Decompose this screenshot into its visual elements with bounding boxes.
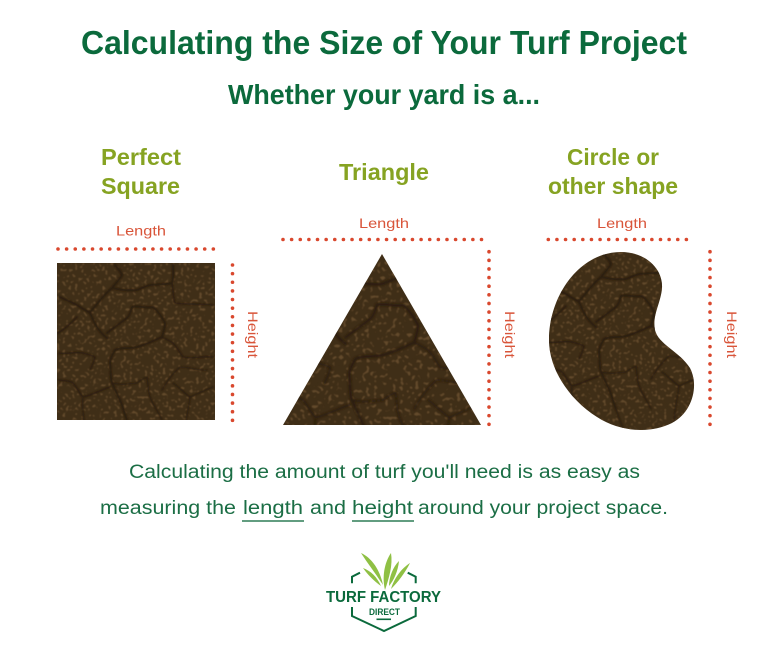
- height label: Height: [724, 311, 740, 358]
- length label: Length: [597, 215, 647, 231]
- icon: grass blades: [361, 553, 410, 590]
- logo bar: [376, 618, 391, 620]
- heading: triangle: Triangle: [339, 159, 429, 185]
- length dotted line: [548, 238, 695, 241]
- length label: Length: [359, 215, 409, 231]
- heading: circle or other shape: [548, 144, 678, 199]
- length dotted line: [283, 238, 483, 241]
- hexagon outline: [352, 573, 416, 631]
- logo subtext: DIRECT: [369, 607, 400, 618]
- length label: Length: [116, 222, 166, 238]
- body text: length: [243, 498, 303, 519]
- length dotted line: [58, 247, 214, 251]
- heading: circle or other shape: other shape: [548, 173, 678, 199]
- body text: measuring the: [100, 498, 236, 519]
- logo: Turf Factory Direct: [326, 553, 442, 631]
- panel: triangle: [281, 163, 515, 426]
- heading: perfect square: Square: [101, 173, 180, 199]
- height dotted line: [487, 252, 491, 425]
- panel: circle or other shape: [546, 144, 740, 432]
- subtitle: Whether your yard is a...: [228, 79, 540, 110]
- logo wordmark: TURF FACTORY: [326, 589, 442, 606]
- soil square: [57, 263, 215, 420]
- heading: perfect square: Perfect: [101, 144, 181, 170]
- body text: and: [310, 498, 346, 519]
- body text: [100, 462, 668, 521]
- body text: height: [352, 498, 414, 519]
- height dotted line: [231, 265, 234, 421]
- height dotted line: [708, 252, 712, 425]
- heading: circle or other shape: Circle or: [567, 144, 659, 170]
- height label: Height: [502, 311, 518, 358]
- body text: around your project space.: [418, 498, 668, 519]
- soil kidney shape: [549, 252, 694, 430]
- height label: Height: [245, 311, 261, 358]
- heading: perfect square: [101, 144, 181, 199]
- body text: Calculating the amount of turf you'll need is as easy as: [129, 462, 640, 483]
- title: Calculating the Size of Your Turf Project: [81, 24, 687, 61]
- panel: perfect square: [57, 144, 261, 443]
- soil triangle: [283, 254, 481, 425]
